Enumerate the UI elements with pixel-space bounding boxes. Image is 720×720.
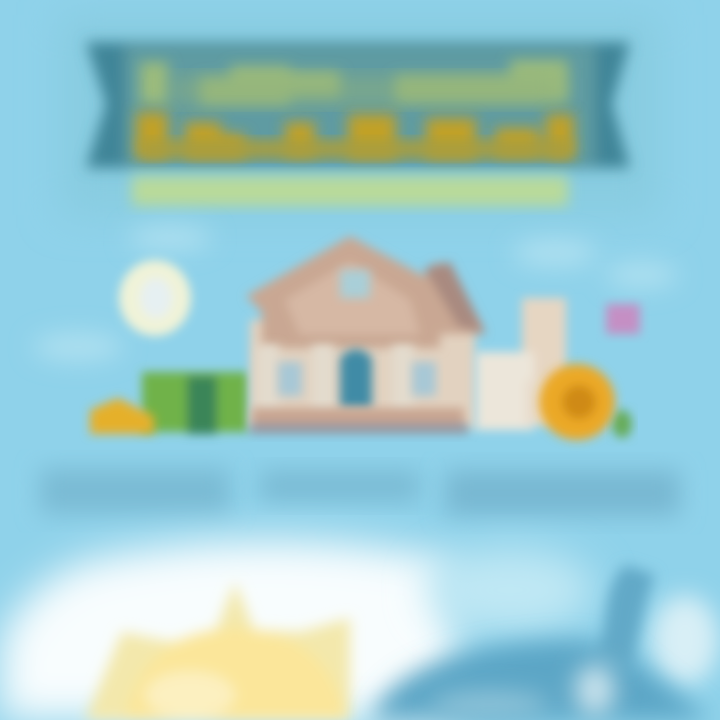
cloud far right — [651, 595, 719, 685]
house pillars — [257, 345, 414, 413]
swoosh highlight — [430, 664, 615, 716]
house attic window — [340, 270, 370, 298]
bottom scene, clipped to frame — [0, 540, 719, 720]
icon: coins — [90, 398, 154, 434]
title line 2 — [136, 112, 574, 158]
title line 1 — [140, 60, 568, 104]
text band column 2 — [260, 470, 420, 502]
swoosh shape — [372, 565, 710, 720]
house left window — [278, 362, 302, 396]
thermometer / tower — [476, 298, 566, 430]
pale cloud right — [425, 548, 595, 632]
house right window — [412, 362, 436, 396]
sun — [85, 582, 350, 720]
house roof — [246, 236, 486, 348]
subtitle — [132, 176, 568, 206]
title line 1 tint — [170, 78, 560, 102]
title banner — [86, 42, 630, 168]
icon: money stack — [142, 372, 248, 434]
house — [246, 236, 486, 434]
upper sky tint — [60, 15, 660, 215]
house walls — [250, 320, 475, 428]
icon: gold coin — [539, 364, 615, 440]
swoosh body — [372, 640, 710, 720]
large cloud — [0, 540, 460, 720]
icon: leaf — [612, 410, 632, 438]
text band column 3 — [445, 470, 680, 516]
icon: clock — [119, 260, 191, 336]
text band column 1 — [40, 468, 230, 514]
house steps — [250, 408, 468, 434]
icon: flag — [606, 304, 640, 334]
house door — [340, 349, 372, 408]
swoosh tail — [595, 565, 655, 670]
title line 2 tint — [140, 140, 572, 158]
clouds around house — [33, 226, 678, 361]
